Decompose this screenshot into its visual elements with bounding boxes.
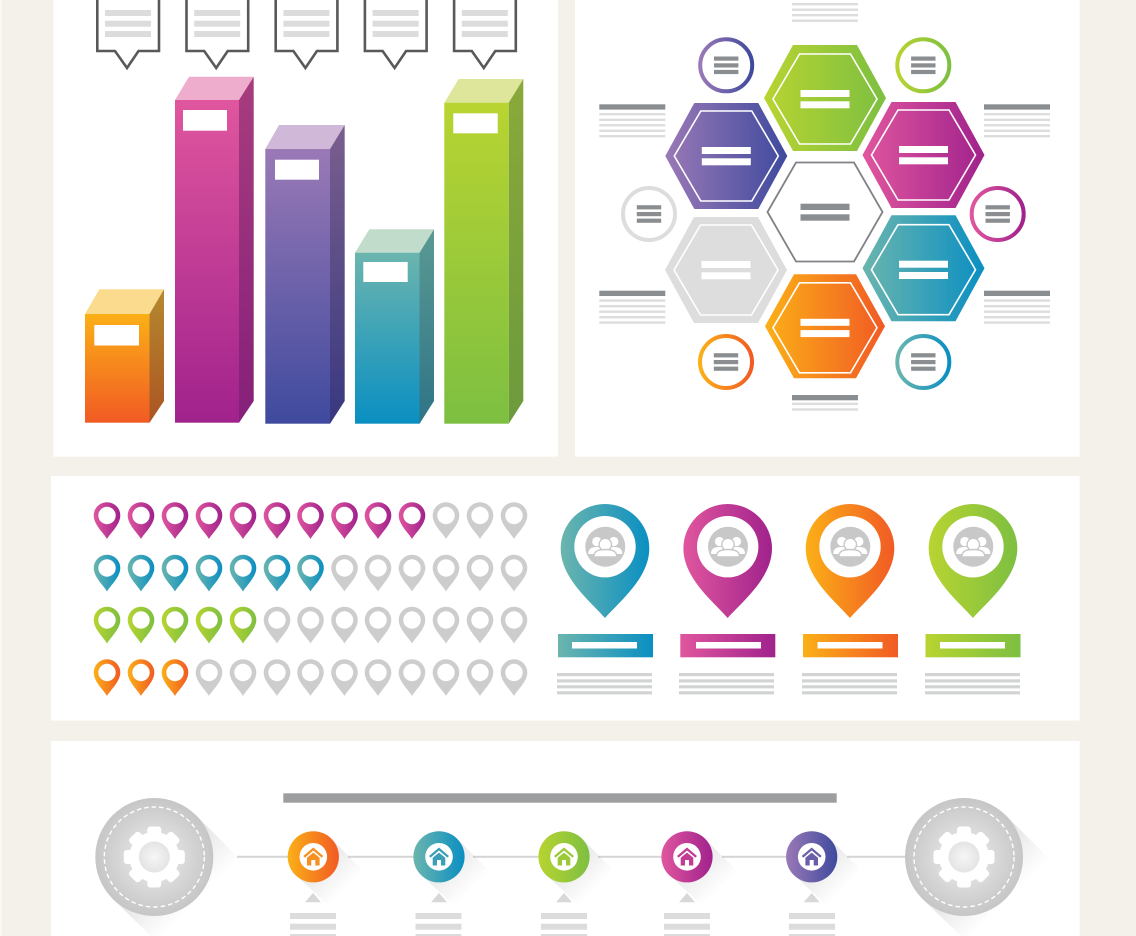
hexagon: magenta <box>862 102 984 208</box>
bar: orange <box>85 289 164 423</box>
text block: lower right <box>984 291 1050 324</box>
bar: magenta <box>175 77 254 423</box>
timeline node: magenta <box>661 831 740 936</box>
pin row: orange 3 of 13 <box>94 659 527 696</box>
panel: timeline <box>51 741 1080 936</box>
timeline connector line <box>237 856 907 858</box>
large pin card: magenta <box>679 504 775 694</box>
callout 5 <box>454 0 516 68</box>
3D bar chart <box>85 77 523 424</box>
panel: 3D bar chart <box>54 0 558 457</box>
timeline node: teal <box>413 831 492 936</box>
timeline heading bar <box>283 793 837 803</box>
callout row above the bars <box>97 0 516 68</box>
text block: upper right <box>984 104 1050 137</box>
hexagon: teal <box>862 215 984 321</box>
hexagon: orange <box>765 274 885 378</box>
hexagon diagram <box>599 3 1050 411</box>
gear badge: left <box>95 798 241 936</box>
text block: lower left <box>599 291 665 324</box>
ring: gray <box>623 188 675 240</box>
panel: hexagon diagram <box>575 0 1080 457</box>
hexagon: gray <box>665 217 787 323</box>
callout 3 <box>276 0 337 68</box>
pin row: magenta 10 of 13 <box>94 502 527 539</box>
panel: map pins <box>51 476 1080 720</box>
ring: teal <box>897 336 949 388</box>
timeline node: green <box>538 831 617 936</box>
pin row: teal 7 of 13 <box>94 555 527 592</box>
timeline node: orange <box>288 831 366 936</box>
text block: bottom center <box>792 395 858 411</box>
callout 4 <box>365 0 427 68</box>
callout 1 <box>97 0 159 68</box>
bar: purple <box>265 125 345 424</box>
hexagon: center outline <box>768 162 882 262</box>
bar: green <box>444 79 523 424</box>
text block: top center <box>792 3 858 22</box>
pin row: green 5 of 13 <box>94 607 527 644</box>
ring: magenta <box>972 188 1024 240</box>
hexagon: purple <box>665 103 787 209</box>
timeline node: purple <box>786 831 864 936</box>
hexagon: green <box>764 45 886 151</box>
large pin card: green <box>925 504 1020 694</box>
left edge strip <box>0 0 2 936</box>
ring: purple <box>700 39 752 91</box>
ring: orange <box>700 336 752 388</box>
callout 2 <box>186 0 248 68</box>
text block: upper left <box>599 104 665 137</box>
ring: green <box>897 39 949 91</box>
gear badge: right <box>905 798 1051 936</box>
large pin card: orange <box>802 504 898 694</box>
large pin card: teal <box>557 504 653 694</box>
bar: teal <box>355 229 434 424</box>
